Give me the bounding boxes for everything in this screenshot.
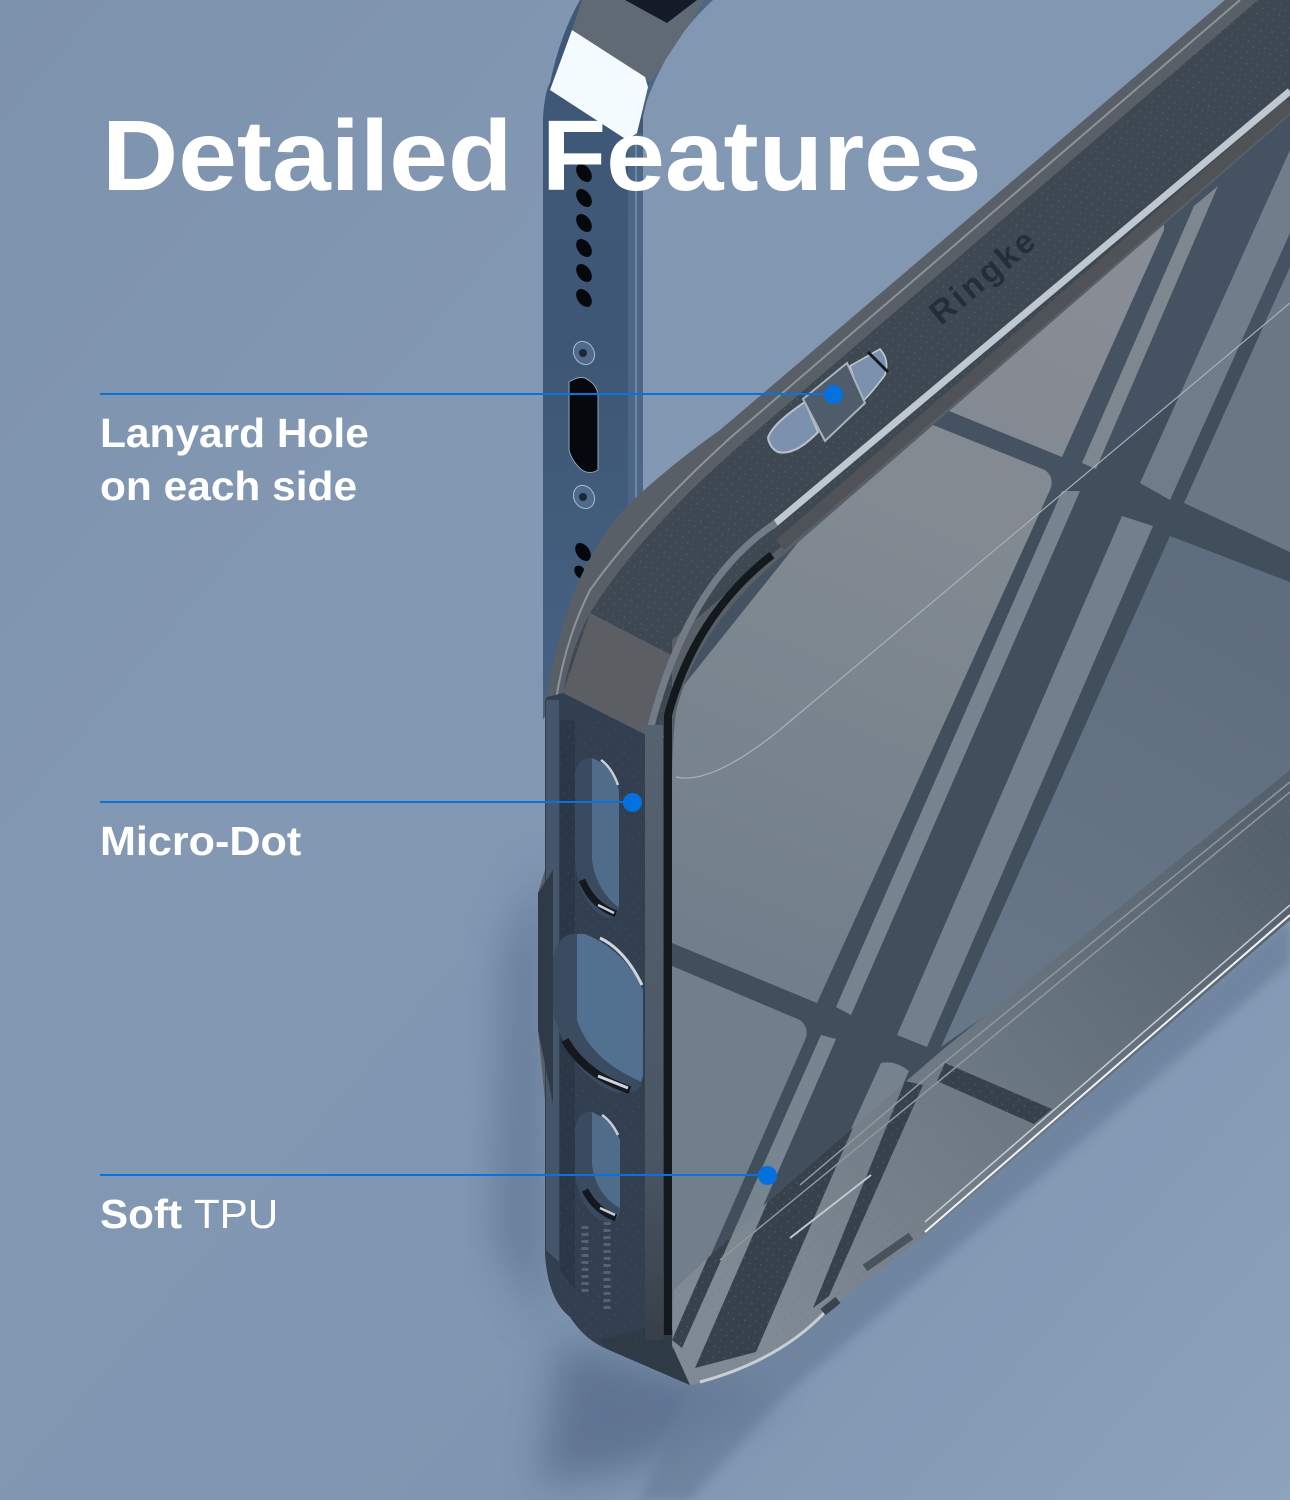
upper cut-out — [575, 758, 619, 918]
embossed marks — [585, 1222, 607, 1310]
button slots — [790, 1175, 871, 1238]
speaker holes — [572, 161, 595, 581]
pointer dot — [824, 385, 843, 404]
callout: soft TPU — [100, 1166, 777, 1237]
outer white edge — [925, 905, 1290, 1222]
pointer dot — [758, 1166, 777, 1185]
side cut-outs — [552, 758, 643, 1310]
label — [100, 410, 369, 509]
case top band — [560, 0, 1290, 740]
inner rim highlight — [645, 91, 1290, 1340]
pointer line — [100, 1174, 767, 1176]
window through case — [672, 115, 1290, 1350]
case side wall — [545, 693, 690, 1385]
callout: micro-dot — [100, 793, 642, 864]
floor shadows — [495, 860, 1290, 1500]
middle cut-out — [552, 934, 643, 1093]
label: Micro-Dot — [100, 818, 301, 864]
lower cut-out — [575, 1112, 620, 1221]
lower edge of clear case — [672, 770, 1290, 1385]
side button bump — [538, 870, 553, 1104]
pointer line — [100, 393, 833, 395]
Ringke logo text: Ringke — [922, 222, 1042, 331]
label: on each side — [100, 463, 357, 509]
charging port — [569, 378, 598, 472]
callout: lanyard hole — [100, 385, 843, 509]
case outer rim — [538, 0, 1290, 1385]
product illustration: phone and clear case — [483, 0, 1290, 1500]
screws — [569, 338, 599, 512]
label: Soft TPU — [100, 1191, 278, 1237]
stripes seen through lower edge — [672, 1035, 1052, 1368]
lanyard hole — [768, 349, 888, 453]
reflected panels — [672, 150, 1290, 1362]
rim highlight lines — [556, 0, 1240, 700]
pointer dot — [623, 793, 642, 812]
phone behind case — [543, 0, 713, 720]
label: Lanyard Hole — [100, 410, 369, 456]
translucent corner block — [563, 613, 675, 737]
screen protector reflection — [672, 110, 1290, 780]
title: Detailed Features — [102, 100, 982, 212]
pointer line — [100, 801, 632, 803]
